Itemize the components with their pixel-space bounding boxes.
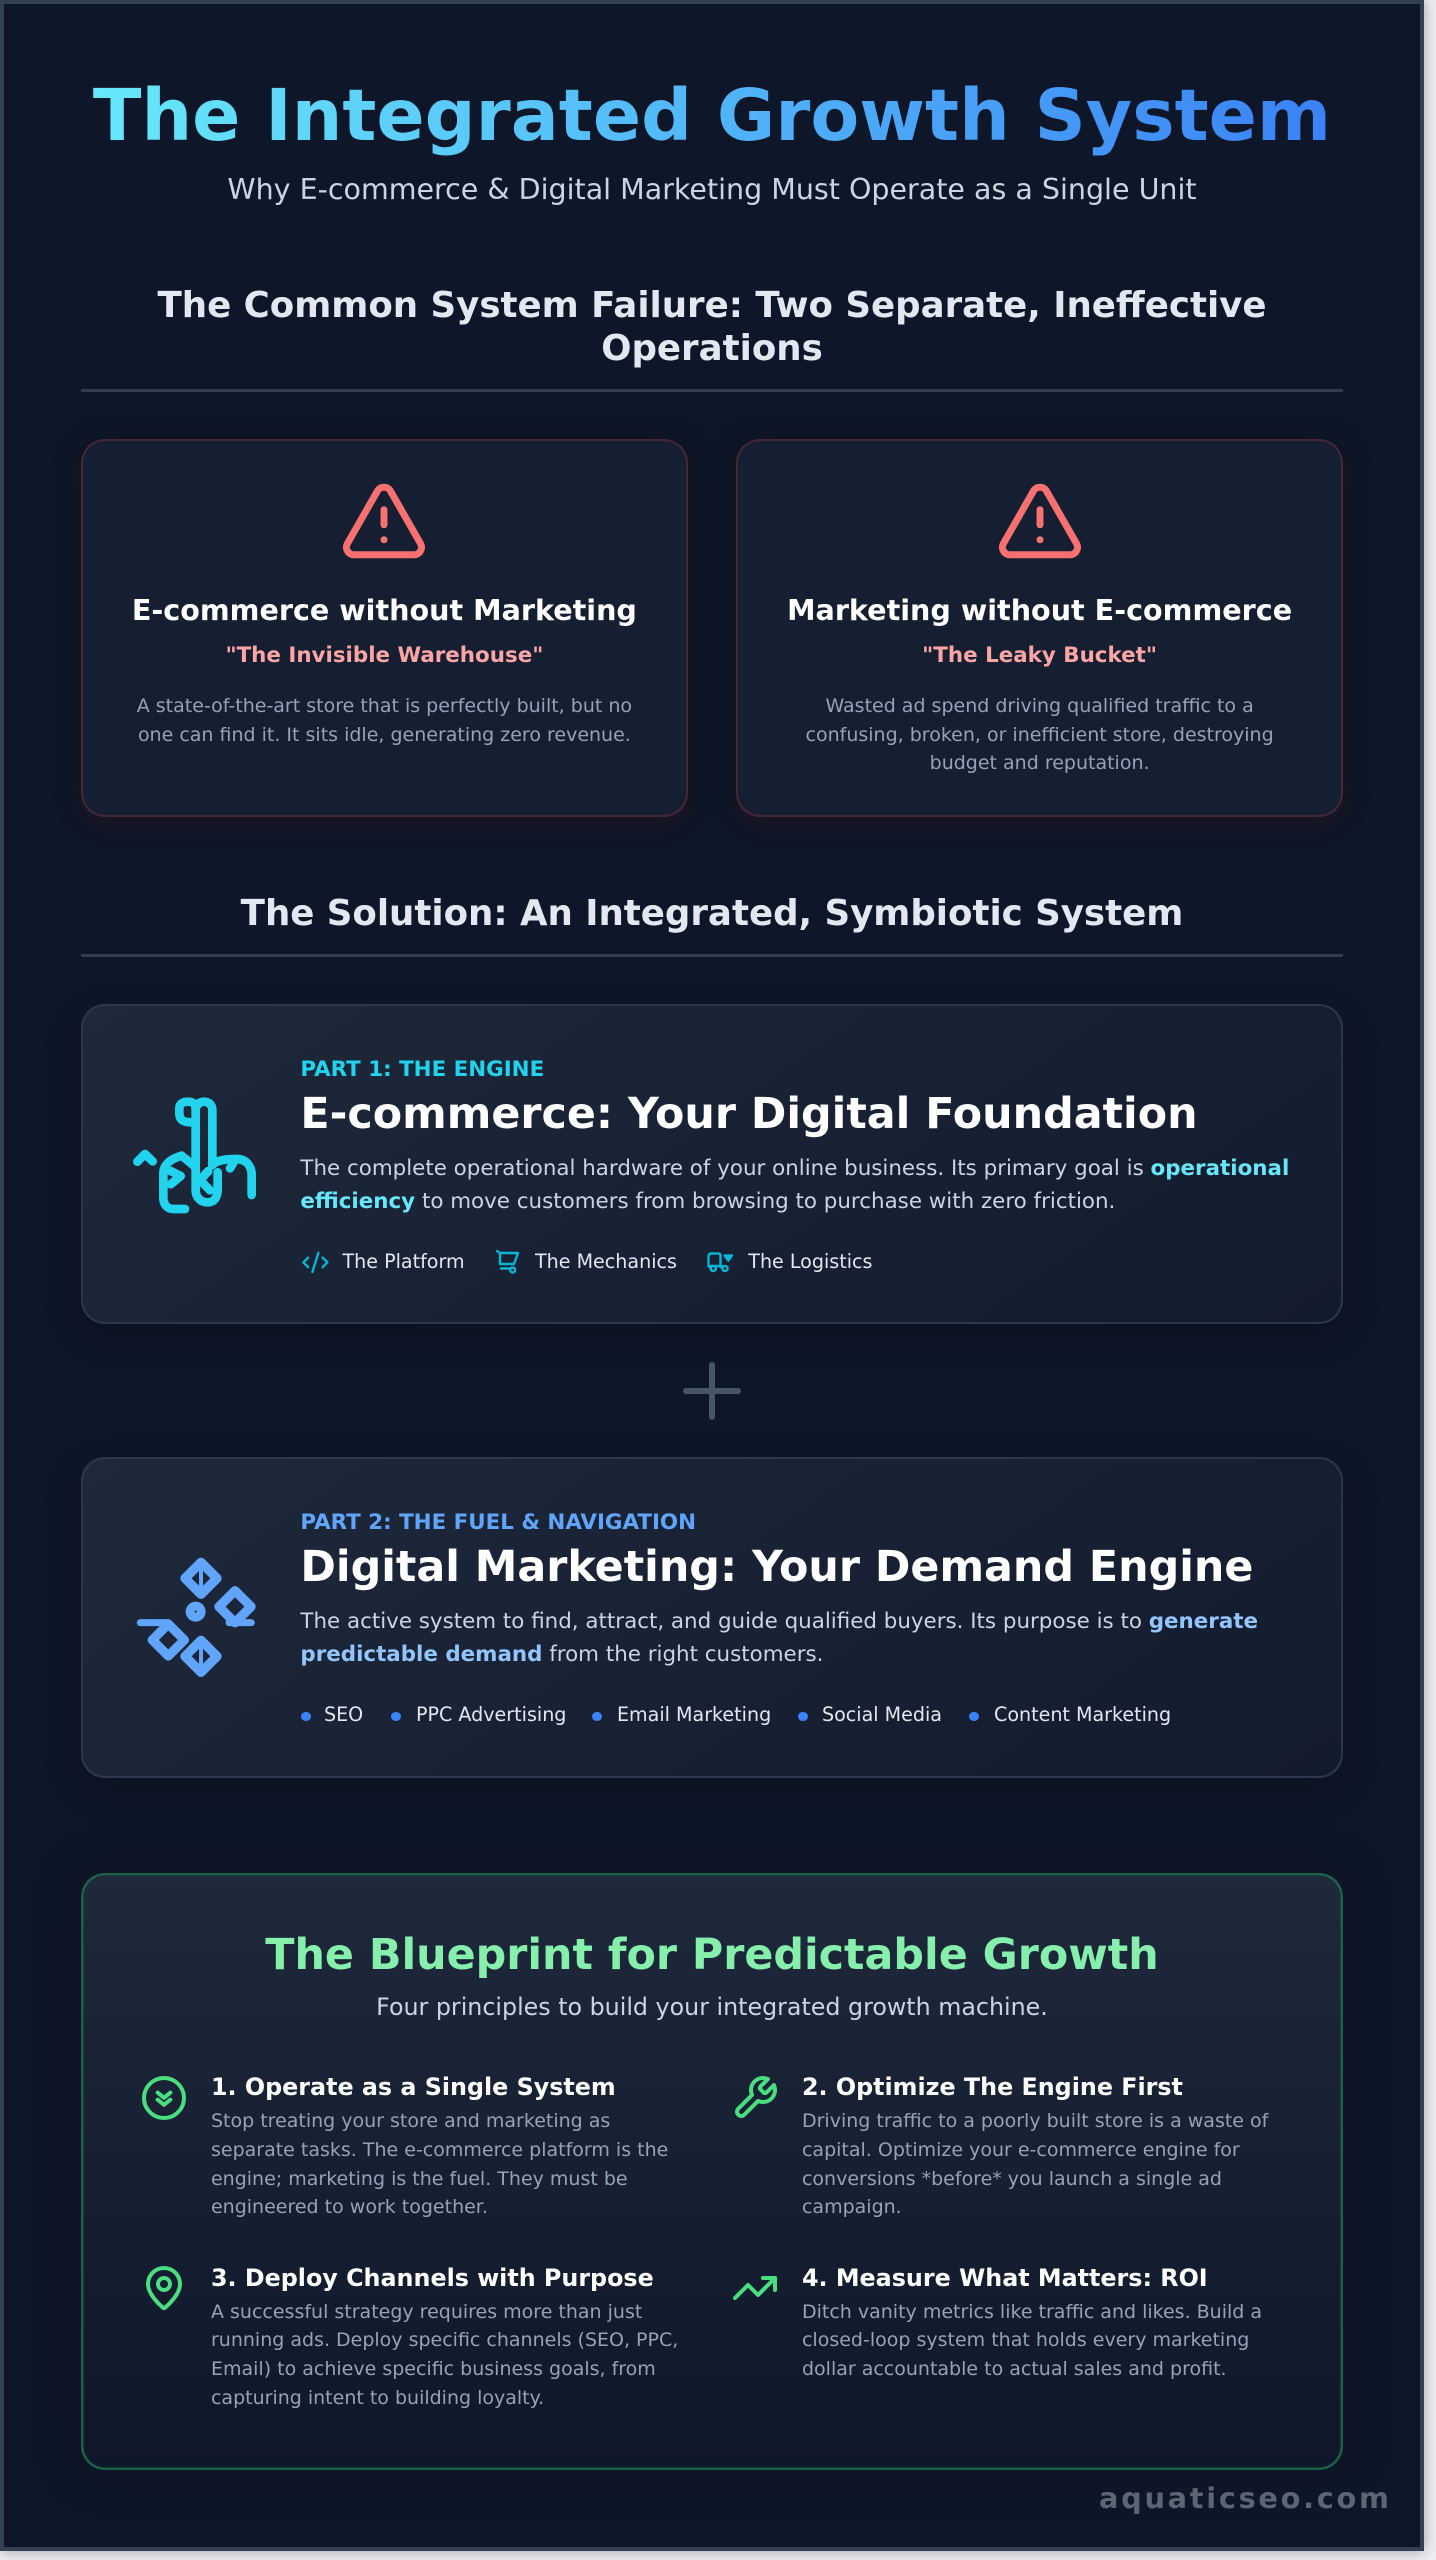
principle title: 1. Operate as a Single System: [211, 2073, 616, 2101]
panel: marketing without e-commerce: [736, 439, 1343, 817]
part title: Digital Marketing: Your Demand Engine: [300, 1542, 1253, 1592]
principle title: 3. Deploy Channels with Purpose: [211, 2264, 654, 2292]
watermark: aquaticseo.com: [1099, 2481, 1392, 2515]
part description: The complete operational hardware of your online business. Its primary goal is operational: [300, 1156, 1289, 1181]
tag: seo: SEO: [324, 1703, 363, 1726]
principle 2: [735, 2073, 1269, 2218]
principle text: [211, 2110, 668, 2218]
principle text: engine; marketing is the fuel. They must be: [211, 2168, 628, 2190]
part description: [300, 1156, 1289, 1214]
icon: code: [302, 1252, 329, 1274]
icon: trending up: [732, 2276, 778, 2300]
principle 3: [146, 2264, 678, 2409]
tag: email marketing: Email Marketing: [617, 1703, 771, 1726]
card title: Marketing without E-commerce: [787, 593, 1292, 627]
principle title: 4. Measure What Matters: ROI: [802, 2264, 1208, 2292]
principle text: [802, 2110, 1269, 2218]
icon: warning triangle: [342, 484, 426, 558]
principle 1: [142, 2073, 668, 2218]
icon: marketing compass: [136, 1558, 256, 1677]
icon: chevrons in circle: [142, 2076, 186, 2120]
principle text: separate tasks. The e-commerce platform is the: [211, 2139, 668, 2161]
part description: The active system to find, attract, and guide qualified buyers. Its purpose is to generate: [300, 1609, 1258, 1634]
part description: efficiency to move customers from browsing to purchase with zero friction.: [300, 1189, 1115, 1214]
part title: E-commerce: Your Digital Foundation: [300, 1089, 1198, 1139]
card description: A state-of-the-art store that is perfectly built, but no: [137, 695, 632, 717]
tag: the logistics: The Logistics: [748, 1250, 872, 1273]
principle text: engineered to work together.: [211, 2196, 488, 2218]
blueprint subtitle: Four principles to build your integrated growth machine.: [376, 1993, 1048, 2021]
blueprint title: The Blueprint for Predictable Growth: [265, 1930, 1159, 1980]
tag: the platform: The Platform: [342, 1250, 465, 1273]
principle text: capital. Optimize your e-commerce engine for: [802, 2139, 1240, 2161]
principle text: [211, 2301, 678, 2409]
principle text: capturing intent to building loyalty.: [211, 2387, 544, 2409]
icon: warning triangle: [998, 484, 1082, 558]
panel: blueprint for predictable growth: [81, 1873, 1343, 2470]
card description: budget and reputation.: [930, 752, 1150, 774]
principle text: [802, 2301, 1262, 2380]
title: The Integrated Growth System: [93, 74, 1331, 157]
principle text: closed-loop system that holds every marketing: [802, 2329, 1249, 2351]
principle text: campaign.: [802, 2196, 902, 2218]
principle text: A successful strategy requires more than just: [211, 2301, 642, 2323]
principle text: Driving traffic to a poorly built store is a waste of: [802, 2110, 1268, 2132]
card title: E-commerce without Marketing: [132, 593, 637, 627]
panel: part 1 e-commerce: [81, 1004, 1343, 1324]
principle text: Stop treating your store and marketing as: [211, 2110, 610, 2132]
card description: confusing, broken, or inefficient store, destroying: [806, 724, 1274, 746]
tag: ppc advertising: PPC Advertising: [416, 1703, 566, 1726]
principle text: dollar accountable to actual sales and profit.: [802, 2358, 1227, 2380]
icon: wrench: [735, 2076, 777, 2118]
card description: [806, 695, 1274, 774]
card description: Wasted ad spend driving qualified traffic to a: [825, 695, 1254, 717]
principle text: running ads. Deploy specific channels (SEO, PPC,: [211, 2329, 678, 2351]
tag: the mechanics: The Mechanics: [535, 1250, 677, 1273]
tag: social media: Social Media: [822, 1703, 942, 1726]
part description: predictable demand from the right customers.: [300, 1642, 823, 1667]
icon: truck: [707, 1252, 734, 1272]
tag: seo: [301, 1703, 363, 1726]
card tagline: "The Leaky Bucket": [922, 643, 1157, 668]
heading: the common system failure: Operations: [601, 328, 823, 368]
card description: [137, 695, 632, 746]
part description: [300, 1609, 1258, 1667]
card tagline: "The Invisible Warehouse": [225, 643, 543, 668]
heading: the common system failure: [158, 285, 1266, 368]
icon: map pin: [146, 2266, 182, 2310]
icon: cart: [496, 1250, 520, 1274]
panel: part 2 digital marketing: [81, 1457, 1343, 1778]
heading: the solution: The Solution: An Integrated, Symbiotic System: [241, 893, 1183, 934]
subtitle: Why E-commerce & Digital Marketing Must Operate as a Single Unit: [227, 173, 1197, 206]
principle text: conversions *before* you launch a single ad: [802, 2168, 1222, 2190]
principle title: 2. Optimize The Engine First: [802, 2073, 1183, 2101]
part label: PART 2: THE FUEL & NAVIGATION: [300, 1510, 696, 1534]
heading: the common system failure: The Common System Failure: Two Separate, Ineffective: [158, 285, 1266, 326]
card description: one can find it. It sits idle, generating zero revenue.: [138, 724, 631, 746]
principle 4: [732, 2264, 1262, 2380]
panel: e-commerce without marketing: [81, 439, 688, 817]
tag: content marketing: Content Marketing: [994, 1703, 1171, 1726]
icon: e-commerce engine: [133, 1097, 256, 1214]
principle text: Ditch vanity metrics like traffic and likes. Build a: [802, 2301, 1262, 2323]
part label: PART 1: THE ENGINE: [300, 1056, 544, 1082]
principle text: Email) to achieve specific business goals, from: [211, 2358, 656, 2380]
icon: plus: [683, 1362, 741, 1420]
